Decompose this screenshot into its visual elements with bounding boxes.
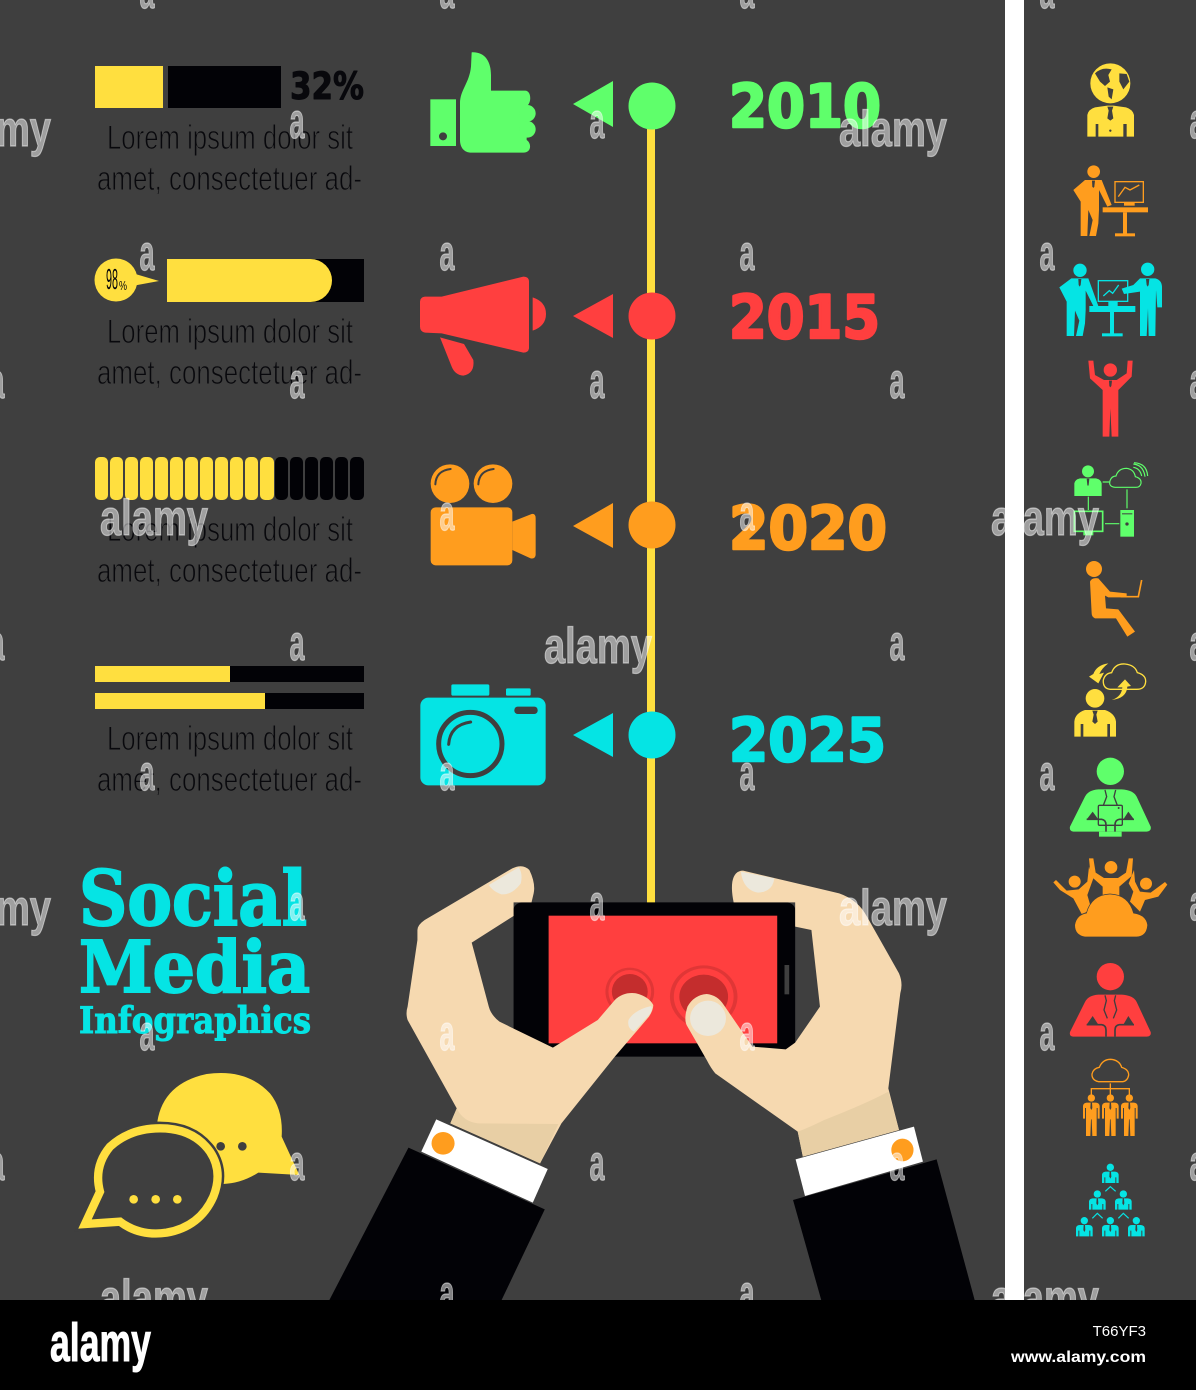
- timeline item 2015: [420, 277, 880, 376]
- timeline node: [628, 712, 676, 758]
- illustration: hands holding phone: [329, 866, 975, 1300]
- watermark overlay: a: [1040, 1005, 1055, 1061]
- icon: team on cloud: [1053, 858, 1167, 937]
- icon: network man: [1074, 463, 1148, 537]
- description text: [97, 720, 362, 799]
- watermark overlay: a: [740, 485, 755, 541]
- watermark overlay: alamy: [991, 1270, 1099, 1326]
- arrow: [573, 503, 613, 548]
- icon: team pyramid: [1076, 1164, 1145, 1236]
- watermark overlay: alamy: [991, 490, 1099, 546]
- rounded progress bar: [167, 259, 364, 302]
- footer band: [0, 1300, 1196, 1390]
- timeline node: [628, 82, 676, 130]
- icon: man with tablet: [1070, 758, 1151, 837]
- year 2020: 2020: [729, 494, 887, 564]
- timeline line: [647, 106, 655, 906]
- double progress bars: [95, 666, 364, 709]
- title: Social: [79, 854, 307, 943]
- watermark overlay: a: [440, 225, 455, 281]
- watermark overlay: a: [890, 1135, 905, 1191]
- right cuff: [796, 1127, 923, 1196]
- icon: man at chart desk: [1073, 165, 1148, 236]
- watermark overlay: a: [290, 615, 305, 671]
- watermark overlay: a: [1040, 225, 1055, 281]
- icon: two men at chart desk: [1059, 263, 1162, 336]
- description text: Lorem ipsum dolor sit: [107, 313, 353, 351]
- panel: stat 98 percent: [94, 258, 364, 392]
- icon: cloud team hierarchy: [1083, 1059, 1138, 1136]
- icon: speech bubbles: [85, 1073, 299, 1234]
- icon: photo camera: [420, 684, 546, 785]
- watermark overlay: alamy: [839, 880, 947, 936]
- phone: [514, 902, 795, 1057]
- panel: stat double bars: [95, 666, 364, 799]
- panel: right icon column: [1053, 63, 1167, 1236]
- title: [79, 854, 311, 1042]
- icon: businessman red: [1070, 963, 1151, 1037]
- icon: laptop user: [1086, 561, 1142, 637]
- title: Media: [79, 925, 310, 1009]
- timeline node: [628, 502, 676, 548]
- description text: Lorem ipsum dolor sit: [107, 720, 353, 758]
- watermark overlay: alamy: [839, 101, 947, 157]
- watermark overlay: a: [290, 875, 305, 931]
- watermark overlay: a: [740, 225, 755, 281]
- watermark overlay: a: [140, 225, 155, 281]
- description text: [97, 119, 362, 198]
- left cuff: [421, 1119, 548, 1203]
- icon: globe businessman: [1087, 63, 1134, 137]
- year 2015: 2015: [729, 283, 880, 353]
- watermark overlay: a: [740, 745, 755, 801]
- watermark overlay: a: [590, 353, 605, 409]
- watermark overlay: a: [890, 353, 905, 409]
- segmented bar 32%: [95, 66, 281, 108]
- watermark overlay: a: [140, 1005, 155, 1061]
- watermark overlay: a: [290, 1135, 305, 1191]
- right sleeve: [793, 1159, 975, 1300]
- watermark overlay: a: [140, 745, 155, 801]
- pill progress bar: [95, 457, 364, 500]
- description text: Lorem ipsum dolor sit: [107, 119, 353, 157]
- watermark overlay: a: [290, 93, 305, 149]
- year 2010: 2010: [729, 72, 881, 142]
- watermark overlay: alamy: [100, 1270, 208, 1326]
- description text: amet, consectetuer ad-: [97, 552, 362, 590]
- speech bubble 98%: %: [119, 278, 127, 293]
- timeline item 2025: [420, 684, 886, 785]
- description text: [97, 511, 362, 590]
- timeline node: [628, 292, 676, 340]
- description text: amet, consectetuer ad-: [97, 354, 362, 392]
- watermark overlay: a: [590, 875, 605, 931]
- watermark overlay: a: [740, 1005, 755, 1061]
- arrow: [573, 81, 613, 127]
- timeline item 2010: [430, 52, 881, 153]
- website: www.alamy.com: [1010, 1349, 1146, 1366]
- icon: video camera: [431, 464, 536, 565]
- arrow: [573, 294, 613, 338]
- icon: megaphone: [420, 277, 546, 376]
- watermark overlay: a: [590, 93, 605, 149]
- watermark overlay: a: [740, 1265, 755, 1321]
- watermark overlay: a: [440, 1265, 455, 1321]
- year 2025: 2025: [729, 706, 886, 776]
- footer logo: alamy: [50, 1313, 151, 1373]
- description text: Lorem ipsum dolor sit: [107, 511, 353, 549]
- title: Infographics: [79, 1000, 311, 1042]
- watermark overlay: a: [890, 615, 905, 671]
- description text: [97, 313, 362, 392]
- watermark overlay: alamy: [544, 618, 652, 674]
- panel: stat 32 percent: [95, 65, 364, 198]
- left hand: [407, 866, 653, 1163]
- watermark overlay: a: [290, 353, 305, 409]
- left sleeve: [329, 1148, 545, 1300]
- watermark overlay: alamy: [100, 490, 208, 546]
- watermark overlay: a: [590, 1135, 605, 1191]
- value 32%: 32%: [290, 65, 364, 108]
- panel: stat segmented pills: [95, 457, 364, 590]
- description text: amet, consectetuer ad-: [97, 761, 362, 799]
- description text: amet, consectetuer ad-: [97, 160, 362, 198]
- speech bubble 98%: [94, 258, 159, 302]
- icon: thumbs up: [430, 52, 536, 153]
- white vertical divider: [1005, 0, 1024, 1300]
- watermark overlay: a: [440, 1005, 455, 1061]
- image id: T66YF3: [1093, 1323, 1146, 1340]
- arrow: [573, 713, 613, 757]
- watermark overlay: a: [440, 485, 455, 541]
- watermark overlay: a: [1040, 745, 1055, 801]
- timeline item 2020: [431, 464, 887, 565]
- icon: cloud sync man: [1074, 663, 1146, 737]
- watermark overlay: a: [440, 745, 455, 801]
- speech bubble 98%: 98: [106, 264, 118, 296]
- icon: man raising arms: [1088, 361, 1133, 437]
- right hand: [685, 871, 902, 1157]
